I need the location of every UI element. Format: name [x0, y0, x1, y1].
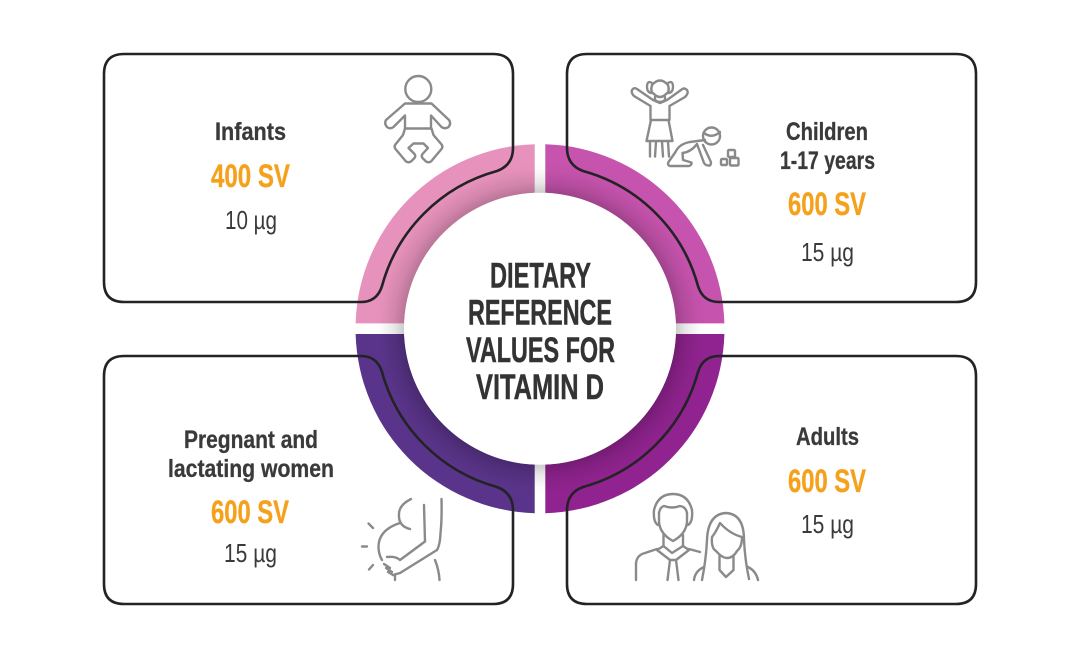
central ring [355, 144, 725, 514]
amount: 10 µg: 10 µg [225, 205, 277, 235]
centre title: REFERENCE [468, 294, 612, 333]
ring segment: adults [545, 334, 724, 513]
centre title [466, 256, 615, 407]
ring segment: children [545, 144, 724, 323]
icon: girl and crawling toddler [632, 80, 738, 166]
amount: 15 µg: 15 µg [224, 538, 277, 568]
centre title: DIETARY [490, 256, 591, 296]
panel outline [567, 356, 976, 604]
icon: baby [385, 76, 450, 162]
centre disc [404, 193, 676, 465]
ring segment: infants [356, 144, 535, 323]
panel outline [567, 54, 976, 302]
heading: pregnant and lactating women: Pregnant and [184, 426, 318, 454]
panel outline [104, 54, 513, 302]
panel outline [104, 356, 513, 604]
icon: pregnant woman [362, 499, 442, 580]
heading: children 1-17 years: Children [786, 118, 868, 146]
icon: man and woman [636, 494, 758, 580]
heading: infants: Infants [215, 118, 286, 146]
heading: pregnant and lactating women: lactating women [168, 455, 334, 483]
panel: infants [104, 54, 513, 302]
heading: pregnant and lactating women [168, 426, 334, 483]
heading: children 1-17 years: 1-17 years [780, 147, 875, 175]
value: 600 SV: 600 SV [788, 186, 866, 222]
value: 400 SV: 400 SV [211, 158, 290, 194]
ring segment: pregnant and lactating women [356, 334, 535, 513]
panel: children [567, 54, 976, 302]
value: 600 SV: 600 SV [211, 494, 289, 530]
amount: 15 µg: 15 µg [801, 237, 854, 267]
panel: pregnant and lactating women [104, 356, 513, 604]
centre title: VITAMIN D [476, 368, 604, 407]
amount: 15 µg: 15 µg [801, 509, 854, 539]
heading: children 1-17 years [780, 118, 875, 175]
panel: adults [567, 356, 976, 604]
heading: adults: Adults [796, 423, 859, 451]
ring inner shadow [355, 144, 725, 514]
centre title: VALUES FOR [466, 331, 615, 370]
value: 600 SV: 600 SV [788, 463, 866, 499]
